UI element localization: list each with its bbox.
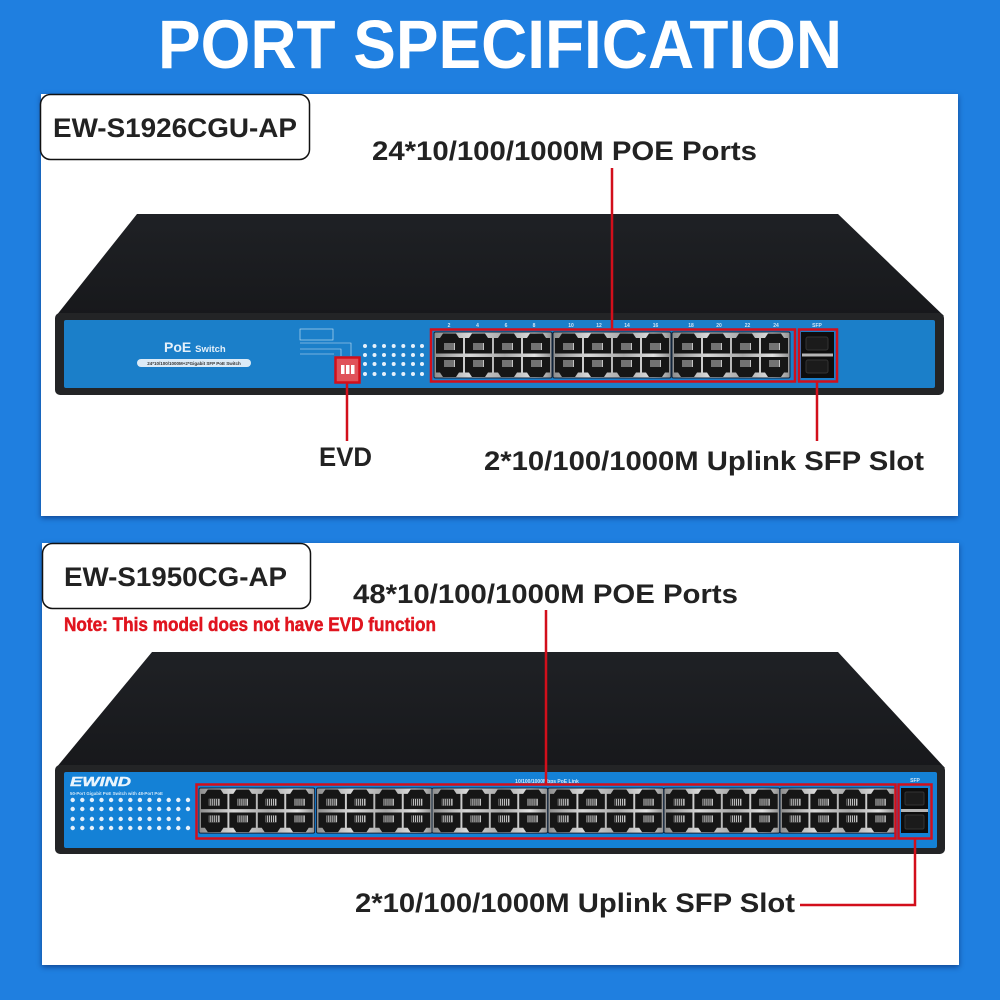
blue front panel <box>64 772 937 848</box>
arrow: SFP leader <box>800 838 915 905</box>
model label box: EW-S1926CGU-AP <box>53 113 297 143</box>
arrow: EVD leader <box>346 383 348 441</box>
model pill <box>137 359 251 367</box>
48 RJ45 ports <box>196 784 896 838</box>
port numbers: 24 <box>773 323 779 329</box>
SFP slots <box>799 330 837 382</box>
title: PORT SPECIFICATION <box>158 6 842 83</box>
port numbers: 6 <box>505 323 508 329</box>
port numbers <box>448 323 823 329</box>
arrow: POE ports leader <box>545 610 547 785</box>
SFP slots <box>898 784 932 838</box>
port numbers: 2 <box>448 323 451 329</box>
port numbers: 10 <box>568 323 574 329</box>
panel: EW-S1950CG-AP <box>42 543 959 965</box>
EVD DIP switch <box>336 358 360 382</box>
status LEDs <box>70 798 190 830</box>
label: POE ports: 48*10/100/1000M POE Ports <box>353 579 738 609</box>
brand logo: EWIND <box>70 774 132 789</box>
port numbers: 4 <box>476 323 479 329</box>
switch top cover <box>56 652 945 768</box>
arrow: POE ports leader <box>611 168 613 330</box>
mode legend <box>300 329 351 356</box>
model label box <box>40 94 310 160</box>
port numbers: 18 <box>688 323 694 329</box>
port numbers: 14 <box>624 323 630 329</box>
label: EVD: EVD <box>319 442 372 472</box>
label: SFP slot: 2*10/100/1000M Uplink SFP Slot <box>355 888 795 918</box>
arrow: SFP leader <box>816 381 818 441</box>
port numbers: SFP <box>812 323 823 329</box>
port numbers: 8 <box>533 323 536 329</box>
port numbers: 16 <box>653 323 658 329</box>
blue front panel <box>64 320 935 388</box>
switch front body <box>55 765 945 854</box>
port numbers: 12 <box>596 323 602 329</box>
SFP caption: SFP <box>910 778 921 784</box>
brand subtitle: 50-Port Gigabit PoE Switch with 48-Port PoE <box>70 791 163 796</box>
switch: 26-port PoE switch <box>55 214 944 395</box>
model label box <box>42 544 310 608</box>
port numbers: 20 <box>716 323 722 329</box>
note: no EVD: Note: This model does not have EVD function <box>64 615 436 636</box>
label: SFP slot: 2*10/100/1000M Uplink SFP Slot <box>484 446 924 476</box>
model pill: 24*10/100/1000M+2*Gigabit SFP PoE Switch <box>147 361 241 366</box>
switch front body <box>55 313 944 395</box>
switch top cover <box>56 214 944 316</box>
port link caption: 10/100/1000Mbps PoE Link <box>515 779 579 785</box>
brand label: PoE Switch <box>164 339 226 355</box>
switch: 50-port PoE switch <box>55 652 945 854</box>
label: POE ports: 24*10/100/1000M POE Ports <box>372 136 757 166</box>
24 RJ45 ports <box>431 330 795 382</box>
port numbers: 22 <box>745 323 750 329</box>
panel: EW-S1926CGU-AP <box>40 94 958 516</box>
status LEDs <box>363 344 424 376</box>
model label box: EW-S1950CG-AP <box>64 562 287 592</box>
